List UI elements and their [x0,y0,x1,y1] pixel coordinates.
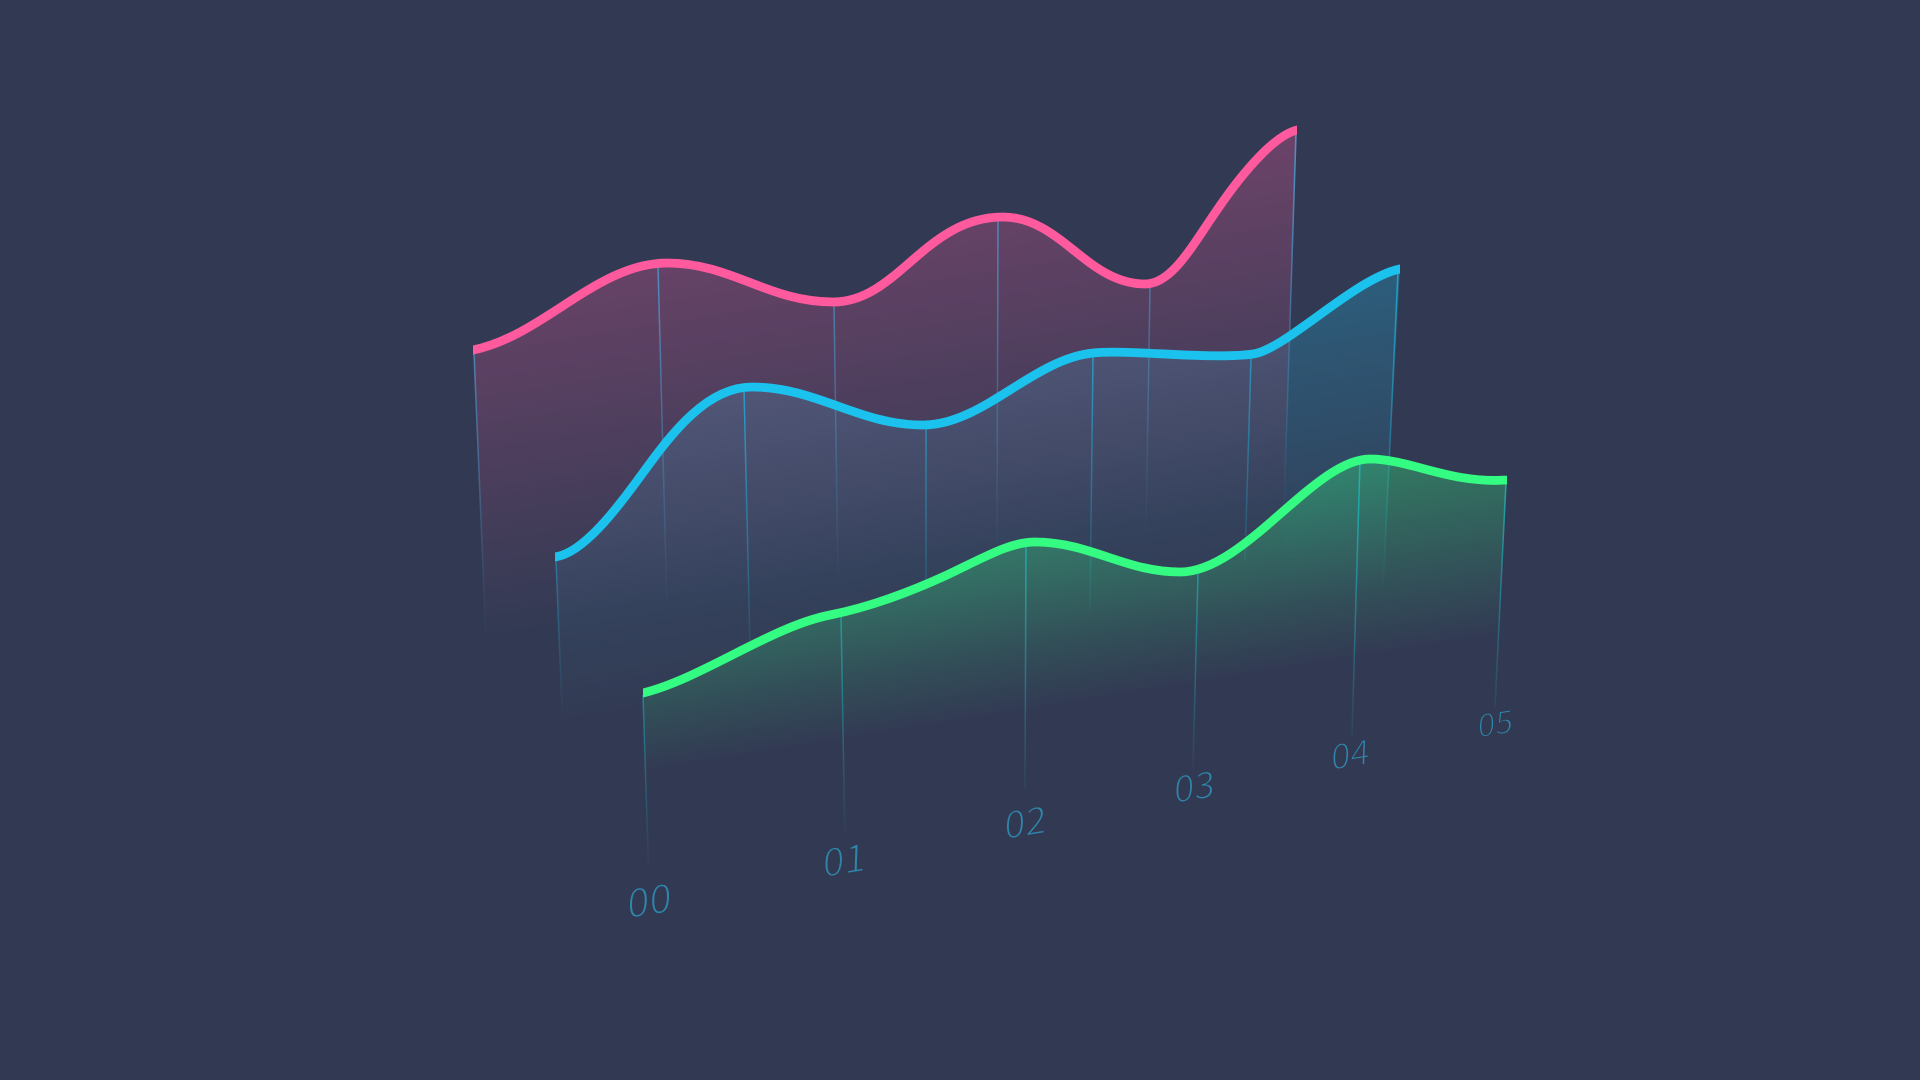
label 04: 04 [1330,724,1371,781]
cyan drop lines [556,271,1398,735]
pink area fill [473,130,1297,640]
cyan area fill over pink [556,342,1289,630]
pink curve [463,128,1307,352]
label 00: 00 [626,865,673,930]
label 05: 05 [1477,696,1514,748]
label 02: 02 [1003,790,1048,851]
series: green [633,459,1517,882]
cyan area fill outside pink [1284,274,1400,523]
green curve [633,459,1517,695]
axis labels [626,696,1514,930]
series: cyan [545,267,1410,735]
green drop lines [643,461,1506,882]
series: pink [463,128,1307,640]
chart: layered 3D area chart [473,126,1511,917]
label 01: 01 [822,826,867,889]
green area fill [643,459,1507,880]
cyan curve [545,267,1410,558]
label 03: 03 [1173,754,1216,814]
pink drop lines [474,132,1296,640]
